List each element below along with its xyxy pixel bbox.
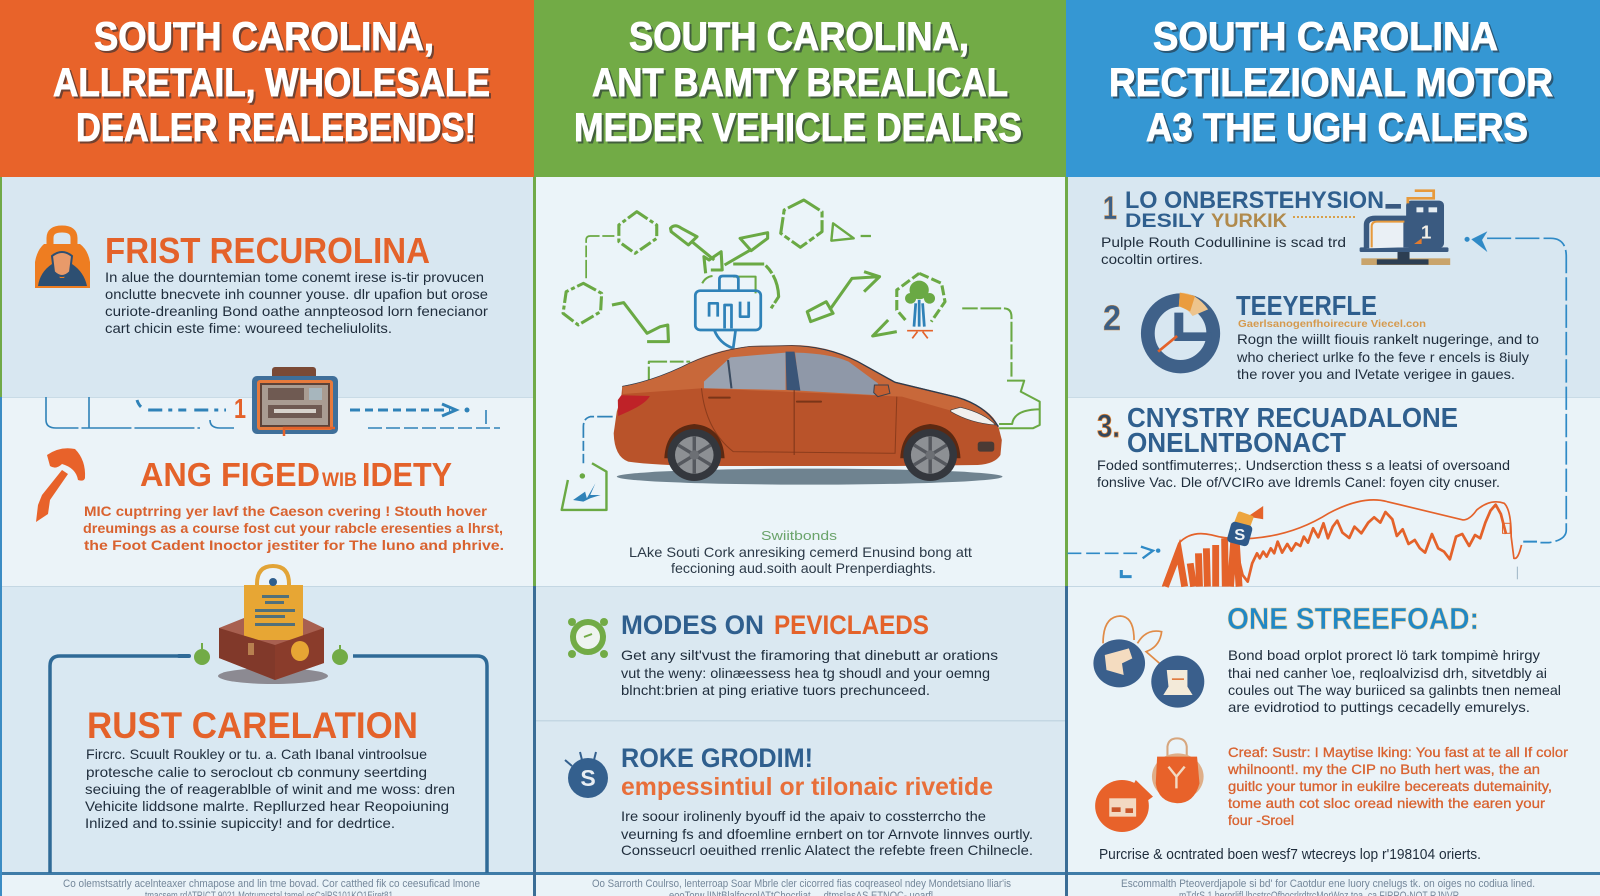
text block: Vehicite liddsone malrte. Repllurzed hear Reopoiuning — [85, 798, 449, 814]
header: motor vehicle — [534, 0, 1066, 177]
green tree — [905, 281, 935, 338]
subheading: empessintiul or tilonaic rivetide — [621, 773, 993, 801]
heading: TEEYERFLE — [1236, 290, 1377, 321]
text block: are evidrotiod to puttings cecadelly emurelys. — [1228, 699, 1530, 715]
heading: ONE STREEFOAD: — [1227, 601, 1479, 636]
text block: the rover you and lVetate verigee in gaues. — [1237, 366, 1515, 382]
heading: FRIST RECUROLINA — [105, 230, 430, 271]
icon: orange lock — [35, 229, 90, 288]
header: motor vehicle: MEDER VEHICLE DEALRS — [574, 106, 1022, 150]
text block: MIC cuptrring yer lavf the Caeson cvering ! Stouth hover — [84, 503, 488, 519]
icon: dollar badge — [565, 752, 608, 798]
text block: Inlized and to.ssinie supiccity! and for dedrtice. — [85, 815, 395, 831]
car — [614, 345, 1003, 485]
heading: YURKIK — [1211, 211, 1287, 232]
header: recreational motor: SOUTH CAROLINA — [1153, 15, 1498, 59]
header: recreational motor: A3 THE UGH CALERS — [1146, 106, 1528, 150]
text block — [85, 746, 455, 831]
icon: orange hammer — [36, 448, 85, 522]
text block: cocoltin ortires. — [1101, 251, 1203, 267]
header: motor vehicle: ANT BAMTY BREALICAL — [592, 61, 1008, 105]
text block: seciuing the of reagerablble of winit and me woss: dren — [85, 781, 455, 797]
icon: orange bags — [1095, 738, 1204, 832]
text block: Fircrc. Scuult Roukley or tu. a. Cath Ibanal vintroolsue — [86, 746, 427, 762]
text block — [621, 647, 998, 698]
header: retail wholesale — [0, 0, 534, 177]
heading: ROKE GRODIM! — [621, 743, 813, 773]
icon: green alarm clock — [568, 618, 608, 658]
heading — [621, 610, 929, 640]
text block — [621, 808, 1033, 858]
heading — [1127, 402, 1458, 458]
text block — [105, 269, 488, 336]
header: retail wholesale: ALLRETAIL, WHOLESALE — [53, 61, 490, 105]
heading — [140, 456, 452, 493]
icon: blue bags — [1093, 616, 1204, 708]
text block: In alue the dourntemian tome conemt irese is-tir provucen — [105, 269, 484, 285]
text block: curiote-dreanling Bond oathe annpteosod lorn fenecianor — [105, 303, 488, 319]
footer notes: Escommalth Pteoverdjapole si bd' for Caotdur ene luory cnelugs tk. on oiges no codiua lined. — [1121, 878, 1535, 890]
number: 3. — [1097, 408, 1120, 444]
heading: IDETY — [362, 456, 452, 493]
text block: who cheriect urlke fo the feve r encels is 8iuly — [1236, 349, 1529, 365]
green process doodles — [562, 200, 1040, 510]
text block: orange — [1227, 744, 1568, 828]
panel: roke grodim — [565, 743, 1033, 858]
panel: one streefoad — [1093, 601, 1568, 863]
text block — [83, 503, 504, 553]
arrow: blue dashed loop — [1068, 232, 1566, 579]
header: motor vehicle: SOUTH CAROLINA, — [629, 15, 969, 59]
car caption — [629, 528, 972, 576]
heading: PEVICLAEDS — [774, 610, 929, 640]
text block — [1228, 647, 1561, 715]
car caption: LAke Souti Cork anresiking cemerd Enusind bong att — [629, 544, 972, 560]
text block: orange: four -Sroel — [1228, 812, 1294, 828]
text block: vut the weny: olinæessess hea tg shoudl and your oemng — [621, 665, 990, 681]
heading: ONELNTBONACT — [1127, 427, 1346, 458]
text block: Rogn the wiillt fiouis rankelt nugeringe, and to — [1237, 331, 1539, 347]
number: 2 — [1103, 299, 1121, 338]
text block: Consseucrl oeuithed rrenlic Alatect the refebte freen Chilnecle. — [621, 842, 1033, 858]
footer notes: Co olemstsatrly acelnteaxer chmapose and lin tme bovad. Cor catthed fik co ceesuficad lmone — [63, 878, 480, 890]
heading: MODES ON — [621, 610, 764, 640]
blue chart corner — [573, 417, 613, 502]
icon: tablet with connector lines — [46, 367, 500, 436]
text block: Pulple Routh Codullinine is scad trd — [1101, 234, 1346, 250]
blue document-badge icon — [695, 276, 761, 348]
header: retail wholesale: DEALER REALEBENDS! — [76, 106, 476, 150]
text block: dreumings as a course fost cut your rabcle eresenties a lhrst, — [83, 520, 503, 536]
panel: frist recurolina — [35, 229, 488, 336]
text block — [1236, 331, 1539, 382]
number: 1 — [1103, 190, 1117, 226]
text block: Foded sontfimuterres;. Undserction thess s a leatsi of oversoand — [1097, 457, 1510, 473]
text block: Ire soour irolinenly byouff id the apaiv to cossterrcho the — [621, 808, 986, 824]
icon: laptop with number — [1360, 191, 1450, 265]
text block: veurning fs and dfoemline ernbert on tor Arnvote linnves ourtly. — [621, 826, 1033, 842]
small link: Gaerlsanogenfhoirecure Viecel.con — [1238, 318, 1426, 330]
header: recreational motor — [1066, 0, 1600, 177]
car caption: feccioning aud.soith aoult Prenperdiaghts. — [671, 560, 936, 576]
text block: cart chicin este fime: woureed techeliulolits. — [105, 320, 392, 336]
icon: bond badge on chart: S — [1234, 526, 1245, 544]
panel: modes on feviclaeds — [568, 610, 998, 698]
panel: rust carelation — [50, 566, 487, 873]
heading: LO ONBERSTEHYSION — [1125, 187, 1384, 214]
text block: coules out The way buriiced sa galinbts tnen nemeal — [1228, 682, 1561, 698]
footer notes — [63, 878, 1535, 896]
text block: protesche calie to seroclout cb conmuny seertding — [86, 764, 427, 780]
icon: lock document on box — [218, 566, 328, 684]
text block: Get any silt'vust the firamoring that dinebutt ar orations — [621, 647, 998, 663]
panel: car illustration — [562, 200, 1040, 510]
heading: DESILY — [1125, 211, 1205, 232]
header: retail wholesale: SOUTH CAROLINA, — [94, 15, 434, 59]
panel: step 2 — [1103, 290, 1539, 382]
heading: RUST CARELATION — [87, 705, 418, 746]
icon: green apples — [194, 643, 348, 665]
heading — [1125, 187, 1384, 232]
text block: onclutte bnecvete inh counner youse. dlr upafion but orose — [105, 286, 488, 302]
icon: bond badge on chart — [1226, 506, 1263, 547]
text block: fonslive Vac. Dle of/VCIRo ave ldremls Canel: foyen city cnuser. — [1097, 474, 1500, 490]
heading: ANG FIGED — [140, 456, 320, 493]
panel: ang figed wib idety — [36, 448, 504, 553]
text block: orange: guitlc your tumor in eukilre becereats dutemainity, — [1228, 778, 1552, 794]
text block: Bond boad orplot prorect lö tark tompimè hrirgy — [1228, 647, 1540, 663]
icon: dollar badge: S — [580, 765, 596, 791]
text block — [1097, 457, 1510, 490]
text block: thai ned canher \oe, reqloalvizisd drh, sitvetdbly ai — [1228, 665, 1547, 681]
footer notes: Oo Sarrorth Coulrso, lenterroap Soar Mbrle cler cicorred fias coqreaseol ndey Mondetsiano lliar'is — [592, 878, 1011, 890]
line chart — [1163, 500, 1521, 587]
icon: tablet with connector lines: 1 — [234, 393, 246, 424]
icon: laptop with number: 1 — [1421, 222, 1431, 242]
text block: orange: tome auth cot sloc oread niewith the earen your — [1228, 795, 1545, 811]
text block — [1101, 234, 1346, 267]
header: recreational motor: RECTILEZIONAL MOTOR — [1109, 61, 1553, 105]
text block: blncht:brien at ping eriative tuors prechunceed. — [621, 682, 930, 698]
text block: orange: Creaf: Sustr: I Maytise lking: You fast at te all If color — [1228, 744, 1568, 760]
heading: CNYSTRY RECUADALONE — [1127, 402, 1458, 433]
panel: step 1 — [1101, 187, 1450, 267]
text block: orange: whilnoont!. my the CIP no Buth hert was, the an — [1227, 761, 1540, 777]
heading: WIB — [322, 470, 357, 491]
car caption: Swiitbonds — [761, 528, 838, 543]
icon: gauge — [1148, 293, 1213, 367]
panel: step 3 — [1097, 402, 1521, 587]
frame — [50, 656, 487, 873]
text block: the Foot Cadent Inoctor jestiter for The luno and phrive. — [84, 537, 504, 553]
closing line: Purcrise & ocntrated boen wesf7 wtecreys lop r'198104 orierts. — [1099, 847, 1481, 863]
